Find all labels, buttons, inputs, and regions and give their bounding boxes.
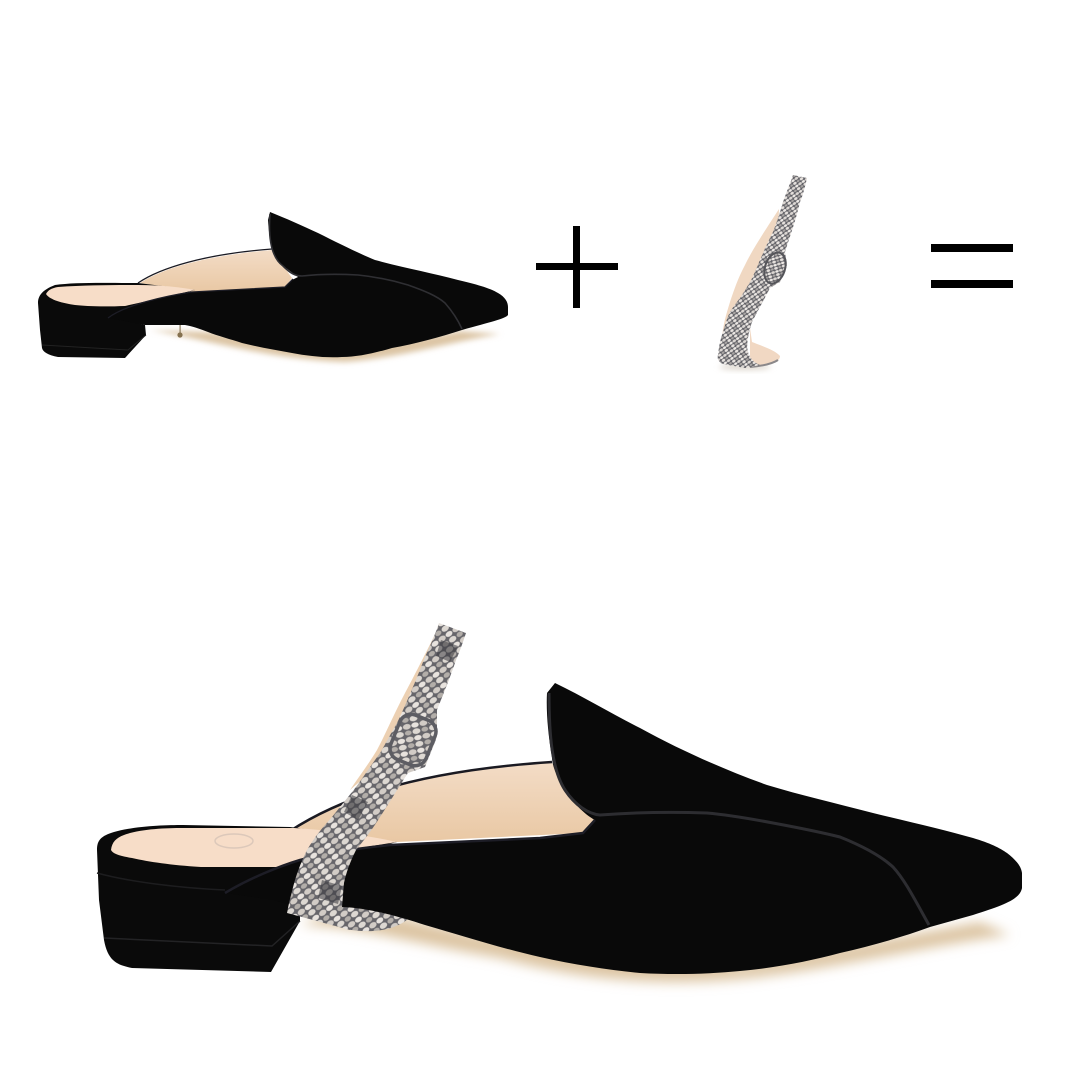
small shoe: counter edge xyxy=(138,249,272,283)
small shoe: kitten pin detail xyxy=(177,325,183,338)
large shoe: insole xyxy=(111,828,397,867)
small shoe: upper piping xyxy=(108,279,293,318)
plus sign xyxy=(536,226,618,308)
large shoe: heel block and rim xyxy=(97,825,397,972)
large shoe: upper piping xyxy=(225,820,595,893)
strap: snakeskin band xyxy=(718,175,807,368)
equals sign xyxy=(931,244,1013,288)
large shoe: heel suede seam xyxy=(97,873,225,890)
large shoe: counter edge xyxy=(290,762,552,831)
large shoe: vamp seam xyxy=(549,693,929,925)
detachable strap xyxy=(718,175,807,370)
large shoe: ground shadow xyxy=(300,905,1010,982)
small shoe: outsole edge xyxy=(42,335,146,350)
strap: foot tab xyxy=(750,328,780,367)
strap: tab edge xyxy=(750,360,778,367)
large shoe: attached snakeskin strap xyxy=(287,623,466,930)
small shoe: interior lining xyxy=(140,250,292,292)
strap: ground shadow xyxy=(719,364,771,370)
strap: inner lining xyxy=(722,209,779,338)
large shoe: strap dark markings xyxy=(318,640,458,904)
large shoe: mule with strap attached xyxy=(97,623,1022,982)
small shoe: mule without strap xyxy=(38,212,508,362)
large shoe: strap underfoot loop xyxy=(340,906,408,931)
large shoe: suede upper xyxy=(225,683,1022,974)
large shoe: strap lining xyxy=(350,630,437,790)
strap: buckle xyxy=(761,250,789,286)
large shoe: buckle xyxy=(386,711,440,769)
small shoe: insole xyxy=(46,285,195,306)
large shoe: interior lining xyxy=(295,763,597,842)
small shoe: ground shadow xyxy=(150,330,500,362)
small shoe: vamp seam xyxy=(270,214,462,329)
large shoe: outsole edge xyxy=(104,921,300,946)
large shoe: insole logo mark xyxy=(215,834,253,848)
small shoe: heel block and rim xyxy=(38,283,195,358)
small shoe: suede upper xyxy=(108,212,508,357)
